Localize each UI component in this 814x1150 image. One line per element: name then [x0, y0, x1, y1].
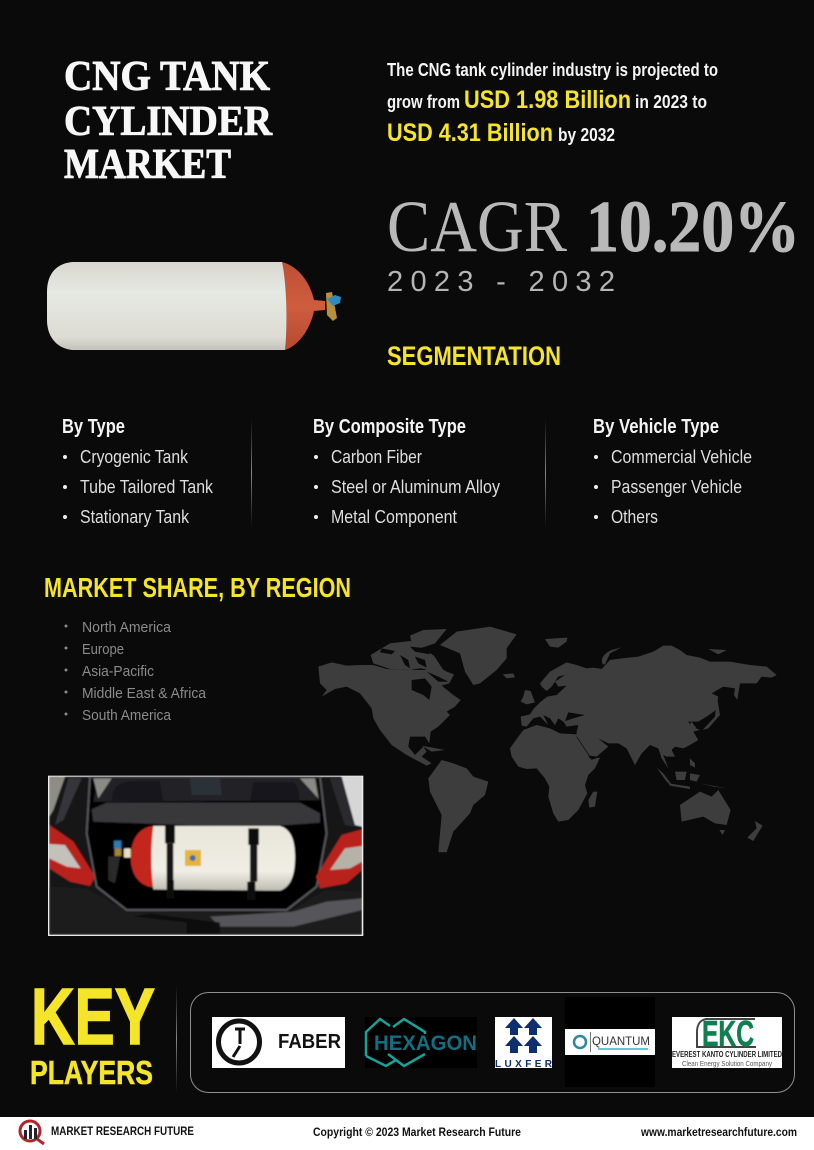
- title: MARKET: [64, 142, 231, 188]
- copyright: Copyright © 2023 Market Research Future: [313, 1125, 521, 1139]
- region list: North America: [82, 619, 172, 636]
- key players heading: [30, 972, 155, 1091]
- North America: [318, 662, 461, 766]
- Oceania: [680, 790, 731, 825]
- CAGR figure: CAGR: [387, 186, 567, 267]
- segment column: by type: By Type: [62, 416, 125, 438]
- logo: Quantum: QUANTUM: [592, 1034, 650, 1048]
- title: [64, 54, 273, 188]
- region list: South America: [82, 707, 172, 724]
- CAGR figure: [387, 186, 800, 267]
- segment column: by type: [62, 416, 214, 527]
- segment column: by vehicle type: Passenger Vehicle: [611, 477, 742, 497]
- title: CYLINDER: [64, 99, 273, 145]
- logo: Hexagon: [365, 1017, 477, 1068]
- market projection text: The CNG tank cylinder industry is projected to: [387, 60, 718, 80]
- key players heading: KEY: [31, 972, 155, 1061]
- segment column: by composite type: Steel or Aluminum Alloy: [331, 477, 500, 497]
- South America: [428, 760, 488, 852]
- logo: EKC: [672, 1013, 782, 1068]
- title: CNG TANK: [64, 54, 270, 100]
- segment column: by vehicle type: By Vehicle Type: [593, 416, 719, 438]
- seas and gulfs: [380, 647, 600, 759]
- footer: MARKET RESEARCH FUTURE: [51, 1124, 194, 1138]
- segment column: by vehicle type: Commercial Vehicle: [611, 447, 752, 467]
- logo: EKC: Clean Energy Solution Company: [682, 1061, 772, 1068]
- logo: Hexagon: HEXAGON: [374, 1032, 477, 1055]
- logo: EKC: EKC: [702, 1013, 754, 1054]
- CAGR period: 2023 - 2032: [387, 266, 615, 298]
- logo: Faber: FABER: [278, 1031, 342, 1053]
- segment column: by type: Stationary Tank: [80, 507, 190, 527]
- segment column: by composite type: Carbon Fiber: [331, 447, 422, 467]
- region list: [64, 619, 207, 724]
- logo: Luxfer: LUXFER: [495, 1059, 553, 1070]
- cylinder photo: [47, 262, 341, 350]
- segment column: by composite type: Metal Component: [331, 507, 457, 527]
- region list: Middle East & Africa: [82, 685, 207, 702]
- market projection text: by 2032: [558, 125, 615, 145]
- icon: footer logo: [20, 1121, 44, 1144]
- logo: Quantum: [565, 997, 655, 1087]
- market projection text: grow from: [387, 92, 460, 112]
- Canadian Arctic: [371, 641, 443, 670]
- logo: EKC: EVEREST KANTO CYLINDER LIMITED: [672, 1050, 782, 1059]
- segment column: by type: Tube Tailored Tank: [80, 477, 214, 497]
- segmentation heading: SEGMENTATION: [387, 341, 561, 371]
- key players panel: [190, 992, 794, 1092]
- key players heading: PLAYERS: [30, 1054, 153, 1091]
- market share heading: MARKET SHARE, BY REGION: [44, 572, 351, 603]
- market projection text: USD 1.98 Billion: [464, 86, 631, 114]
- region list: Asia-Pacific: [82, 663, 154, 680]
- footer: [0, 1117, 814, 1150]
- segment column: by vehicle type: [593, 416, 752, 527]
- region list: Europe: [82, 641, 124, 658]
- logo: Faber: [212, 1017, 345, 1068]
- Africa: [510, 725, 600, 822]
- market projection text: [387, 60, 718, 147]
- segment column: by vehicle type: Others: [611, 507, 658, 527]
- market projection text: in 2023 to: [635, 92, 707, 112]
- segment column: by type: Cryogenic Tank: [80, 447, 189, 467]
- logo: Luxfer: [495, 1017, 553, 1070]
- segment column: by composite type: [313, 416, 500, 527]
- market projection text: USD 4.31 Billion: [387, 119, 553, 147]
- segment column: by composite type: By Composite Type: [313, 416, 466, 438]
- car boot photo: [48, 776, 363, 936]
- Eurasia: [521, 646, 777, 768]
- Asian islands: [657, 768, 673, 787]
- world map: [318, 627, 777, 852]
